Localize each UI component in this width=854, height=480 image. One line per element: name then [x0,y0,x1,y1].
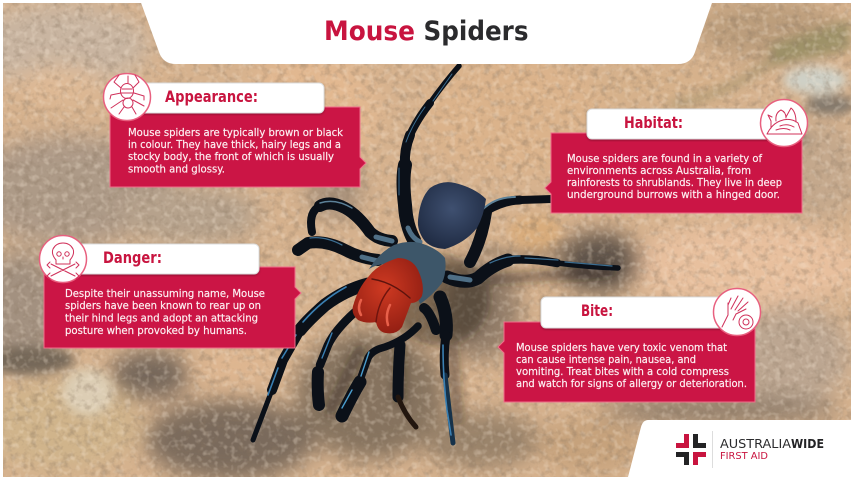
leg: long upper [399,66,459,242]
leg: lower second [318,312,355,405]
logo text: AUSTRALIA [720,437,792,451]
panel: bite [498,288,760,402]
text: bite body: vomiting. Treat bites with a cold compress [516,367,729,378]
logo text [720,437,824,462]
heading: habitat: Habitat: [624,113,683,132]
title banner [140,0,713,64]
text: appearance body [128,128,343,176]
leg: left loop [311,201,392,241]
text: appearance body: stocky body, the front of which is usually [128,152,334,163]
icon: habitat [760,100,808,146]
leg: left middle [298,238,378,261]
spider [253,66,618,443]
text: habitat body: Mouse spiders are found in a variety of [567,154,762,165]
leg: lower left long [253,284,368,440]
text: bite body: Mouse spiders have very toxic venom that [516,343,727,354]
text: danger body [65,289,265,337]
icon: logo cross [676,434,706,465]
text: danger body: spiders have been known to rear up on [65,301,261,312]
logo text: WIDE [791,437,824,451]
panel: danger [40,236,301,348]
text: appearance body: smooth and glossy. [128,164,225,176]
leg: lower fourth [398,345,416,427]
panel: appearance [104,74,366,187]
leg: right lower [447,256,618,281]
text: habitat body: environments across Australia, from [567,166,751,177]
leg: lower third [342,326,418,416]
heading: danger: Danger: [103,248,162,267]
icon: hand with bite [714,288,760,336]
title: Mouse [324,16,415,47]
text: bite body [516,343,747,390]
text: habitat body: rainforests to shrublands. They live in deep [567,178,782,189]
leg: right upper [470,197,552,262]
logo text: FIRST AID [720,451,768,462]
text: danger body: their hind legs and adopt an attacking [65,314,258,324]
text: bite body: can cause intense pain, nausea, and [516,355,696,366]
leg: lower right long [424,297,453,443]
panel: habitat [545,100,808,213]
text: appearance body: in colour. They have thick, hairy legs and a [128,140,341,151]
carapace [369,242,446,304]
logo panel [628,420,851,477]
text: habitat body [567,154,782,201]
heading: appearance: Appearance: [165,87,258,106]
icon: spider [104,74,150,120]
heading: bite: Bite: [581,301,613,320]
icon: skull and crossbones [40,236,86,282]
abdomen [418,182,486,249]
title: Spiders [424,16,528,47]
text: danger body: Despite their unassuming name, Mouse [65,289,265,300]
text: appearance body: Mouse spiders are typically brown or black [128,128,343,139]
text: habitat body: underground burrows with a hinged door. [567,190,780,201]
text: bite body: and watch for signs of allergy or deterioration. [516,379,747,390]
fangs: red chelicerae [353,258,423,333]
text: danger body: posture when provoked by humans. [65,326,247,337]
